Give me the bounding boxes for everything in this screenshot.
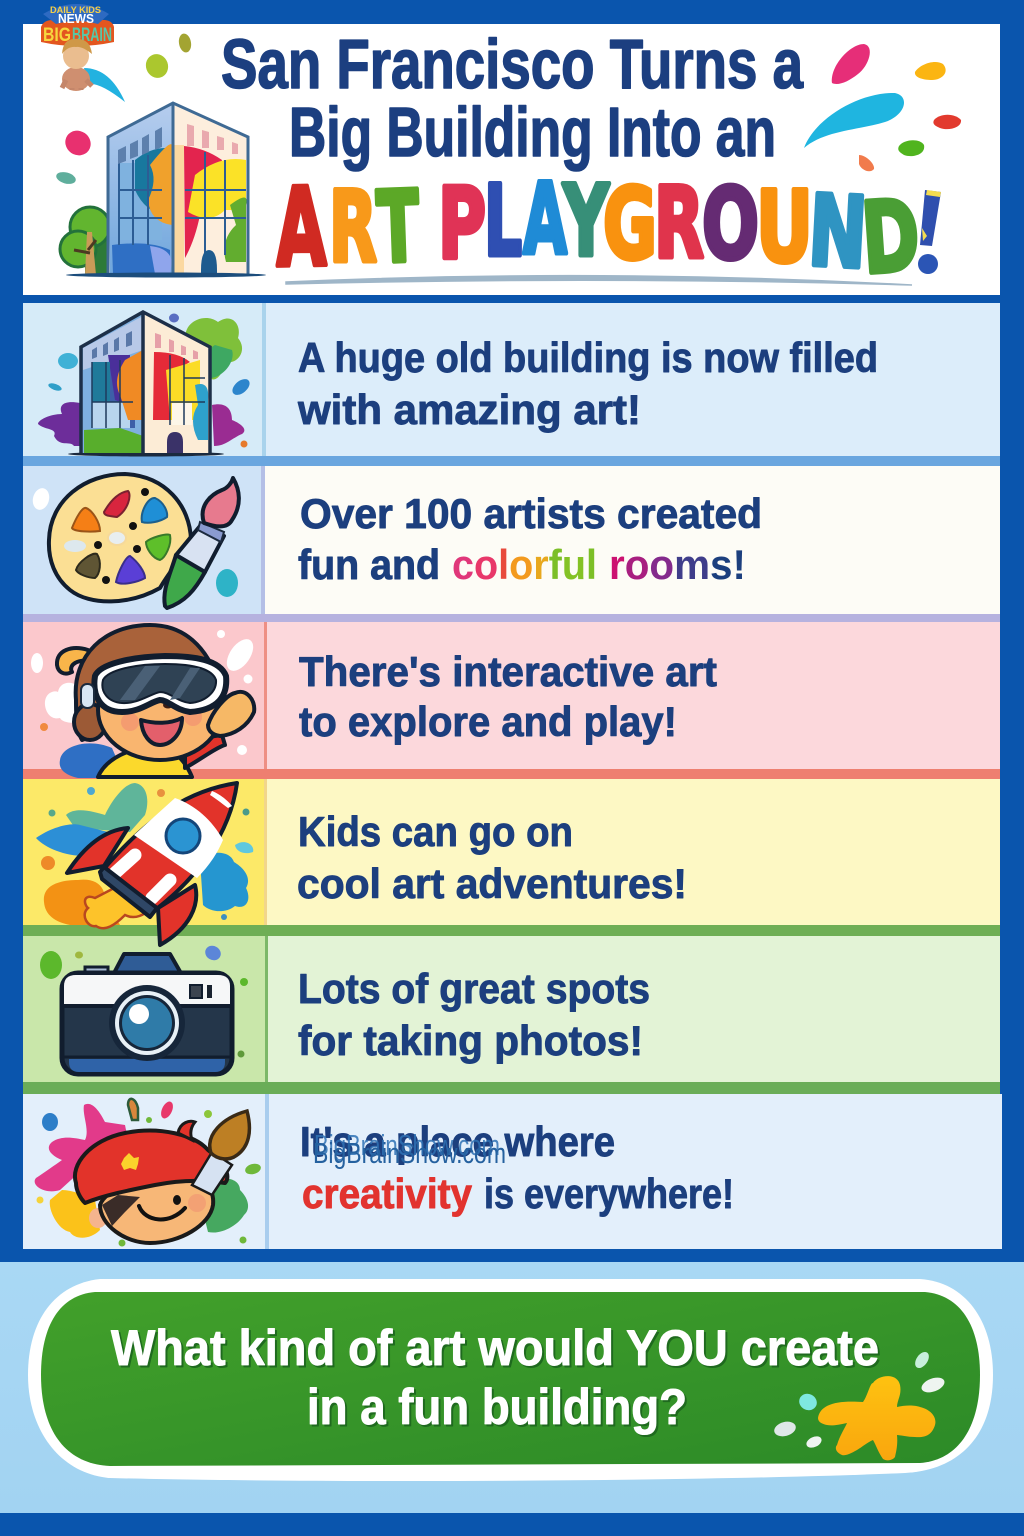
text: row 2: rooms! <box>609 541 746 588</box>
text: row 5: for taking photos! <box>298 1017 643 1064</box>
title: ART PLAYGROUND!: R <box>329 171 377 285</box>
icon: painted building with splats <box>38 312 253 456</box>
title: first two lines <box>221 25 804 171</box>
question text: What kind of art would YOU create <box>113 1322 881 1378</box>
title: ART PLAYGROUND!: R <box>654 167 704 281</box>
row 3: interactive art <box>23 622 1000 779</box>
logo: Daily Kids News Big Brain: NEWS <box>58 11 94 26</box>
row 6: creativity everywhere <box>23 1094 1002 1249</box>
icon: kid with VR goggles <box>31 625 259 778</box>
text: row 5 <box>298 965 650 1064</box>
text: row 3 <box>299 648 717 745</box>
text: row 1: A huge old building is now filled <box>298 334 878 381</box>
illustration: tree <box>60 207 110 275</box>
text: row 5: Lots of great spots <box>298 965 650 1012</box>
header panel <box>23 24 1000 297</box>
question text: in a fun building? <box>309 1381 689 1437</box>
question pill <box>28 1279 993 1481</box>
title: ART PLAYGROUND!: U <box>756 171 813 285</box>
row 2: over 100 artists <box>23 466 1000 622</box>
illustration: painted building <box>66 103 266 278</box>
logo: Daily Kids News Big Brain: BIG <box>43 25 71 46</box>
icon: character with beret and brush <box>35 1099 262 1246</box>
text: row 6 <box>300 1118 734 1217</box>
text: row 4: Kids can go on <box>298 808 573 855</box>
text: row 3: to explore and play! <box>299 698 677 745</box>
watermark: BigBrainShow.com <box>313 1130 506 1170</box>
title: ART PLAYGROUND!: G <box>603 168 657 282</box>
text: row 4 <box>297 808 687 907</box>
paint splashes left of building <box>55 33 193 186</box>
text: row 1: with amazing art! <box>297 386 641 433</box>
text: row 2: Over 100 artists created <box>300 490 762 537</box>
title: ART PLAYGROUND!: T <box>375 170 421 286</box>
title underline swoosh <box>286 276 912 285</box>
title: ART PLAYGROUND!: L <box>484 165 522 279</box>
logo: Daily Kids News Big Brain: DAILY KIDS <box>50 5 101 16</box>
title: first two lines: San Francisco Turns a <box>221 25 804 103</box>
icon: palette and brush <box>30 474 239 608</box>
paint splashes right of title <box>804 44 961 171</box>
text: row 2 <box>298 490 762 588</box>
text: row 6: is everywhere! <box>484 1170 734 1217</box>
title: ART PLAYGROUND!: A <box>275 166 327 291</box>
icon: rocket with paint splats <box>36 783 253 945</box>
title: ART PLAYGROUND!: P <box>438 168 486 282</box>
title: ART PLAYGROUND!: A <box>523 163 567 277</box>
logo: Daily Kids News Big Brain <box>41 4 125 102</box>
text: row 6: It's a place where <box>300 1118 615 1165</box>
row 5: photo spots <box>23 936 1000 1094</box>
title: first two lines: Big Building Into an <box>289 93 776 171</box>
question text <box>111 1320 881 1437</box>
question text: What kind of art would YOU create <box>111 1320 879 1376</box>
icon: camera <box>40 943 248 1074</box>
watermark: BigBrainShow.com: BigBrainShow.com <box>314 1130 500 1162</box>
text: row 4: cool art adventures! <box>297 860 687 907</box>
title: ART PLAYGROUND!: O <box>702 168 759 282</box>
title: ART PLAYGROUND! <box>275 163 941 297</box>
icon: yellow paint splat <box>773 1349 946 1460</box>
title: ART PLAYGROUND!: D <box>858 179 923 297</box>
text: row 1 <box>297 334 878 433</box>
watermark: BigBrainShow.com: BigBrainShow.com <box>313 1138 506 1170</box>
row 4: art adventures <box>23 779 1000 945</box>
bottom call-out band <box>0 1262 1024 1513</box>
text: row 2: colorful <box>452 541 597 588</box>
text: row 6: creativity <box>302 1170 473 1217</box>
title: ART PLAYGROUND!: Y <box>562 165 610 279</box>
text: row 3: There's interactive art <box>299 648 717 695</box>
title: ART PLAYGROUND!: N <box>806 175 870 291</box>
text: row 2: fun and <box>298 541 440 588</box>
logo: Daily Kids News Big Brain: BRAIN <box>72 25 112 46</box>
question text: in a fun building? <box>307 1379 687 1435</box>
row 1: huge old building <box>23 303 1000 466</box>
